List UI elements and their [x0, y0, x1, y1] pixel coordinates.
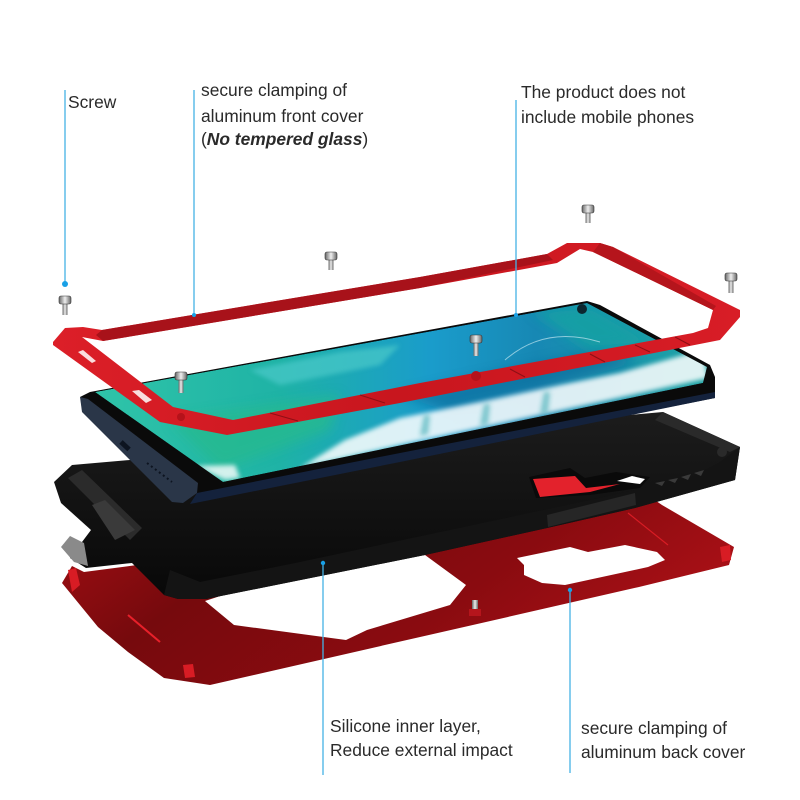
label: front cover: (: [201, 129, 207, 149]
label: front cover: secure clamping of: [201, 80, 347, 100]
label: silicone inner layer: Silicone inner layer,: [330, 716, 481, 736]
front cover: red aluminum frame: [53, 243, 740, 435]
label: front cover: No tempered glass): [207, 129, 368, 149]
label: back cover: secure clamping of: [581, 718, 727, 738]
phone body: [80, 301, 715, 504]
icon: screws: [59, 205, 737, 616]
label: back cover: aluminum back cover: [581, 742, 746, 762]
label: silicone inner layer: Reduce external impact: [330, 740, 513, 760]
label: front cover: aluminum front cover: [201, 106, 364, 126]
phone screen with waterfall wallpaper: [95, 303, 708, 482]
label: phone not included: include mobile phones: [521, 107, 694, 127]
label: screw: Screw: [68, 92, 117, 112]
silicone inner layer: black case: [54, 412, 740, 599]
back cover: red aluminum plate: [62, 490, 734, 685]
label: phone not included: The product does not: [521, 82, 685, 102]
blue leader lines: [62, 90, 572, 775]
